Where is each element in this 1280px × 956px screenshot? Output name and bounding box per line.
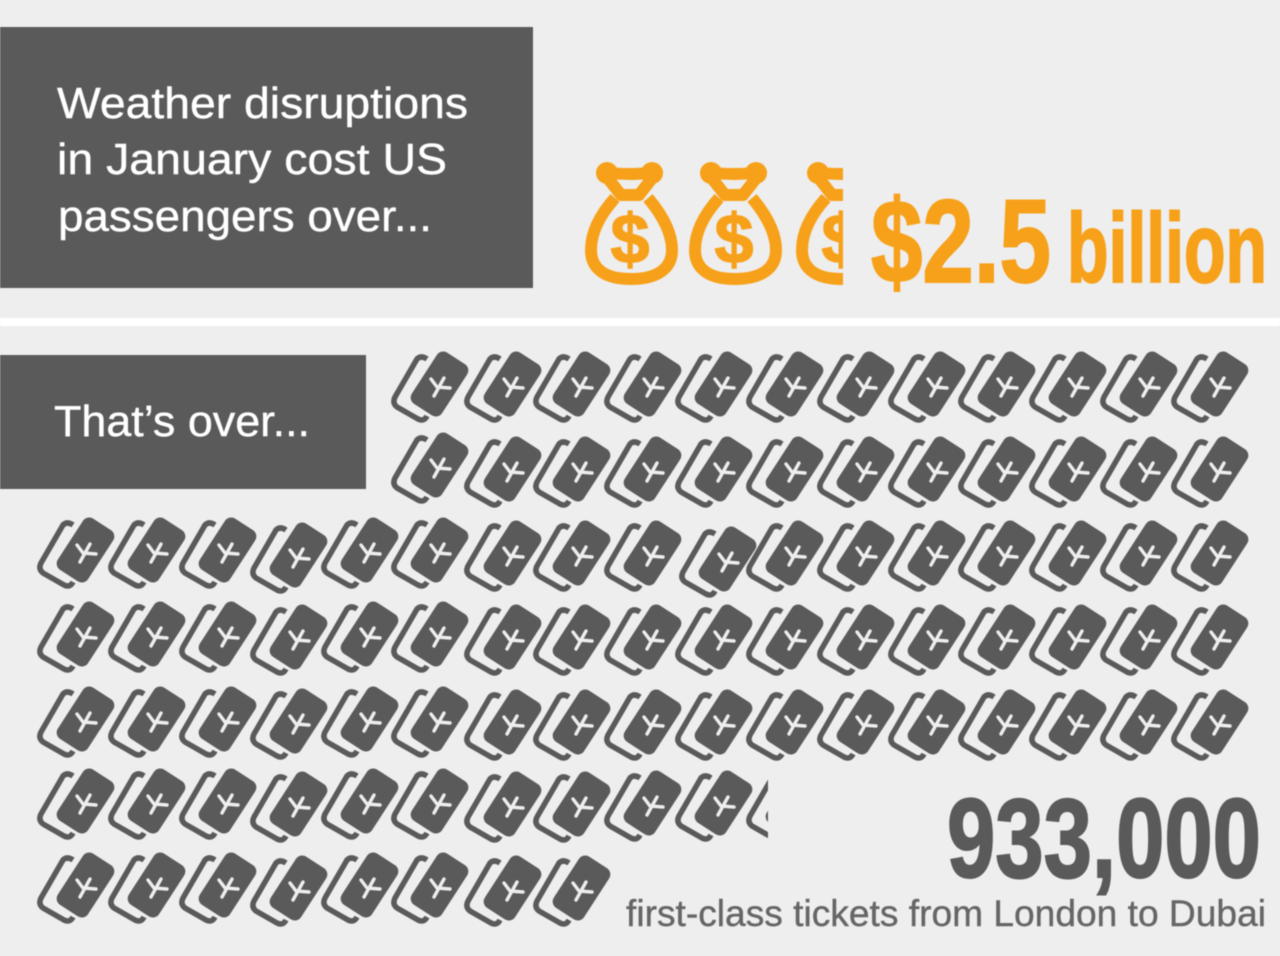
figure: $2.5 billion [871,176,1267,308]
intro text: Weather disruptions [57,79,468,128]
panel: weather disruptions intro [0,27,533,288]
intro text [57,79,468,241]
figure: $2.5 billion: $2.5 [871,176,1051,308]
icon grid: plane tickets [40,348,1252,924]
intro text: in January cost US [57,135,447,184]
divider band [0,318,1280,326]
that's over text: That’s over... [54,397,310,446]
caption: first-class tickets: first-class tickets from London to Dubai [626,893,1266,934]
panel: that's over [0,355,366,489]
intro text: passengers over... [58,192,432,241]
icons: money bags [591,162,883,279]
